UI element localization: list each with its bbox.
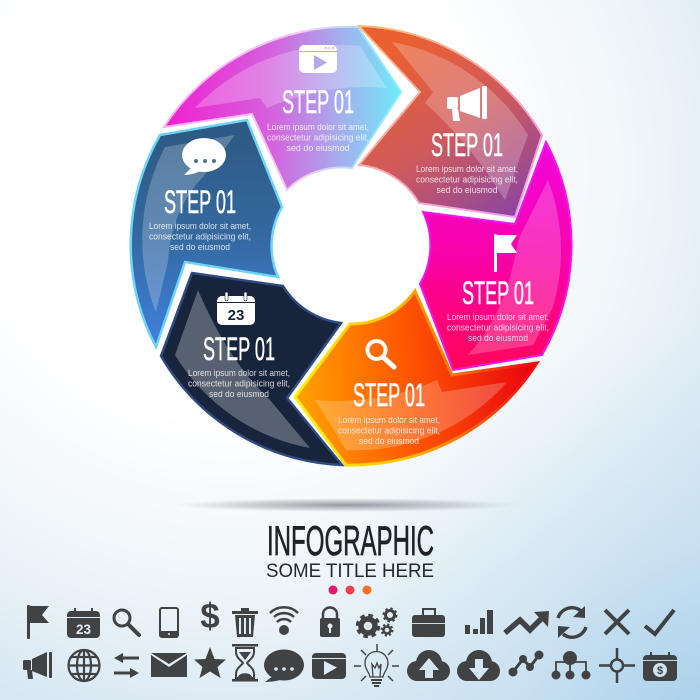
icon: flag [494,234,517,272]
icon: light bulb [354,644,399,686]
icon: megaphone [23,652,52,679]
icon: briefcase [412,609,445,637]
text block: Lorem ipsum dolor sit amet, [149,221,251,232]
text block [447,312,549,344]
icon: wifi [270,607,298,635]
ground shadow [172,498,522,512]
pagination dots [328,586,372,594]
icon: calendar 23: 23 [228,307,244,324]
icon: cloud upload [407,650,450,681]
text block: consectetur adipisicing elit, [338,426,440,436]
icon row 2 [23,644,677,686]
text block [267,122,369,154]
icon: video window [312,653,346,679]
text block: sed do eiusmod [170,242,230,253]
icon: crosshair [599,648,635,683]
text block: Lorem ipsum dolor sit amet, [338,415,440,426]
heading: step: STEP 01 [164,184,236,220]
heading: step: STEP 01 [431,127,503,163]
icon: transfer arrows [114,653,139,678]
icon: line chart [508,650,544,676]
title: INFOGRAPHIC [267,517,434,564]
icon: cloud download [457,650,500,681]
icon: speech bubble [182,138,226,175]
icon: calendar dollar: $ [657,665,663,677]
text block: consectetur adipisicing elit, [416,174,518,186]
icon: globe [68,650,100,681]
text block: consectetur adipisicing elit, [267,132,369,144]
icon: calendar: 23 [76,622,91,637]
panel: step segment right (flag) [420,142,572,370]
icon: envelope [151,653,187,677]
panel: step segment left (chat) [131,120,282,347]
text block: Lorem ipsum dolor sit amet, [267,122,369,133]
text block: Lorem ipsum dolor sit amet, [416,164,518,175]
heading: step: STEP 01 [282,84,354,120]
icon: hourglass [232,644,258,682]
icon row 1 [27,597,674,639]
panel: step segment lower left (calendar) [161,273,342,465]
text block [149,221,251,253]
heading: step: STEP 01 [203,331,275,367]
icon: check [645,610,674,634]
text block: consectetur adipisicing elit, [188,378,290,390]
icon: trend arrow [505,611,549,633]
text block: consectetur adipisicing elit, [149,232,251,242]
text block: sed do eiusmod [468,333,528,344]
text block: sed do eiusmod [209,389,269,400]
icon: bars [465,610,493,634]
icon: calendar dollar [643,652,677,681]
icon: gears [358,608,396,636]
icon: cross [605,610,629,634]
text block: sed do eiusmod [436,185,498,196]
text block: Lorem ipsum dolor sit amet, [447,312,549,323]
panel: step segment bottom (search) [295,291,537,465]
icon: magnifier [368,341,394,367]
icon: video window [299,45,337,73]
icon: trash [232,608,258,637]
icon: star [194,647,226,678]
subtitle: SOME TITLE HERE [266,560,434,582]
icon: megaphone [447,86,487,121]
text block [338,415,440,447]
panel: step segment top (video) [164,27,401,190]
icon: dollar: $ [200,597,220,636]
icon: refresh [558,606,586,638]
text block: sed do eiusmod [286,143,350,154]
icon: search [114,610,139,635]
icon: calendar [67,608,100,638]
text block [416,164,518,196]
text block: Lorem ipsum dolor sit amet, [188,368,290,379]
text block: consectetur adipisicing elit, [447,322,549,334]
icon: hierarchy [552,651,590,680]
text block [188,368,290,400]
heading: step: STEP 01 [353,377,425,413]
icon: lock [320,608,340,637]
heading: step: STEP 01 [462,275,534,311]
panel: step segment upper right (megaphone) [359,26,542,217]
text block: sed do eiusmod [359,436,419,447]
icon: flag [27,605,49,639]
icon: calendar 23 [217,292,255,325]
icon: tablet [160,608,178,637]
icon: speech bubble [264,650,304,682]
